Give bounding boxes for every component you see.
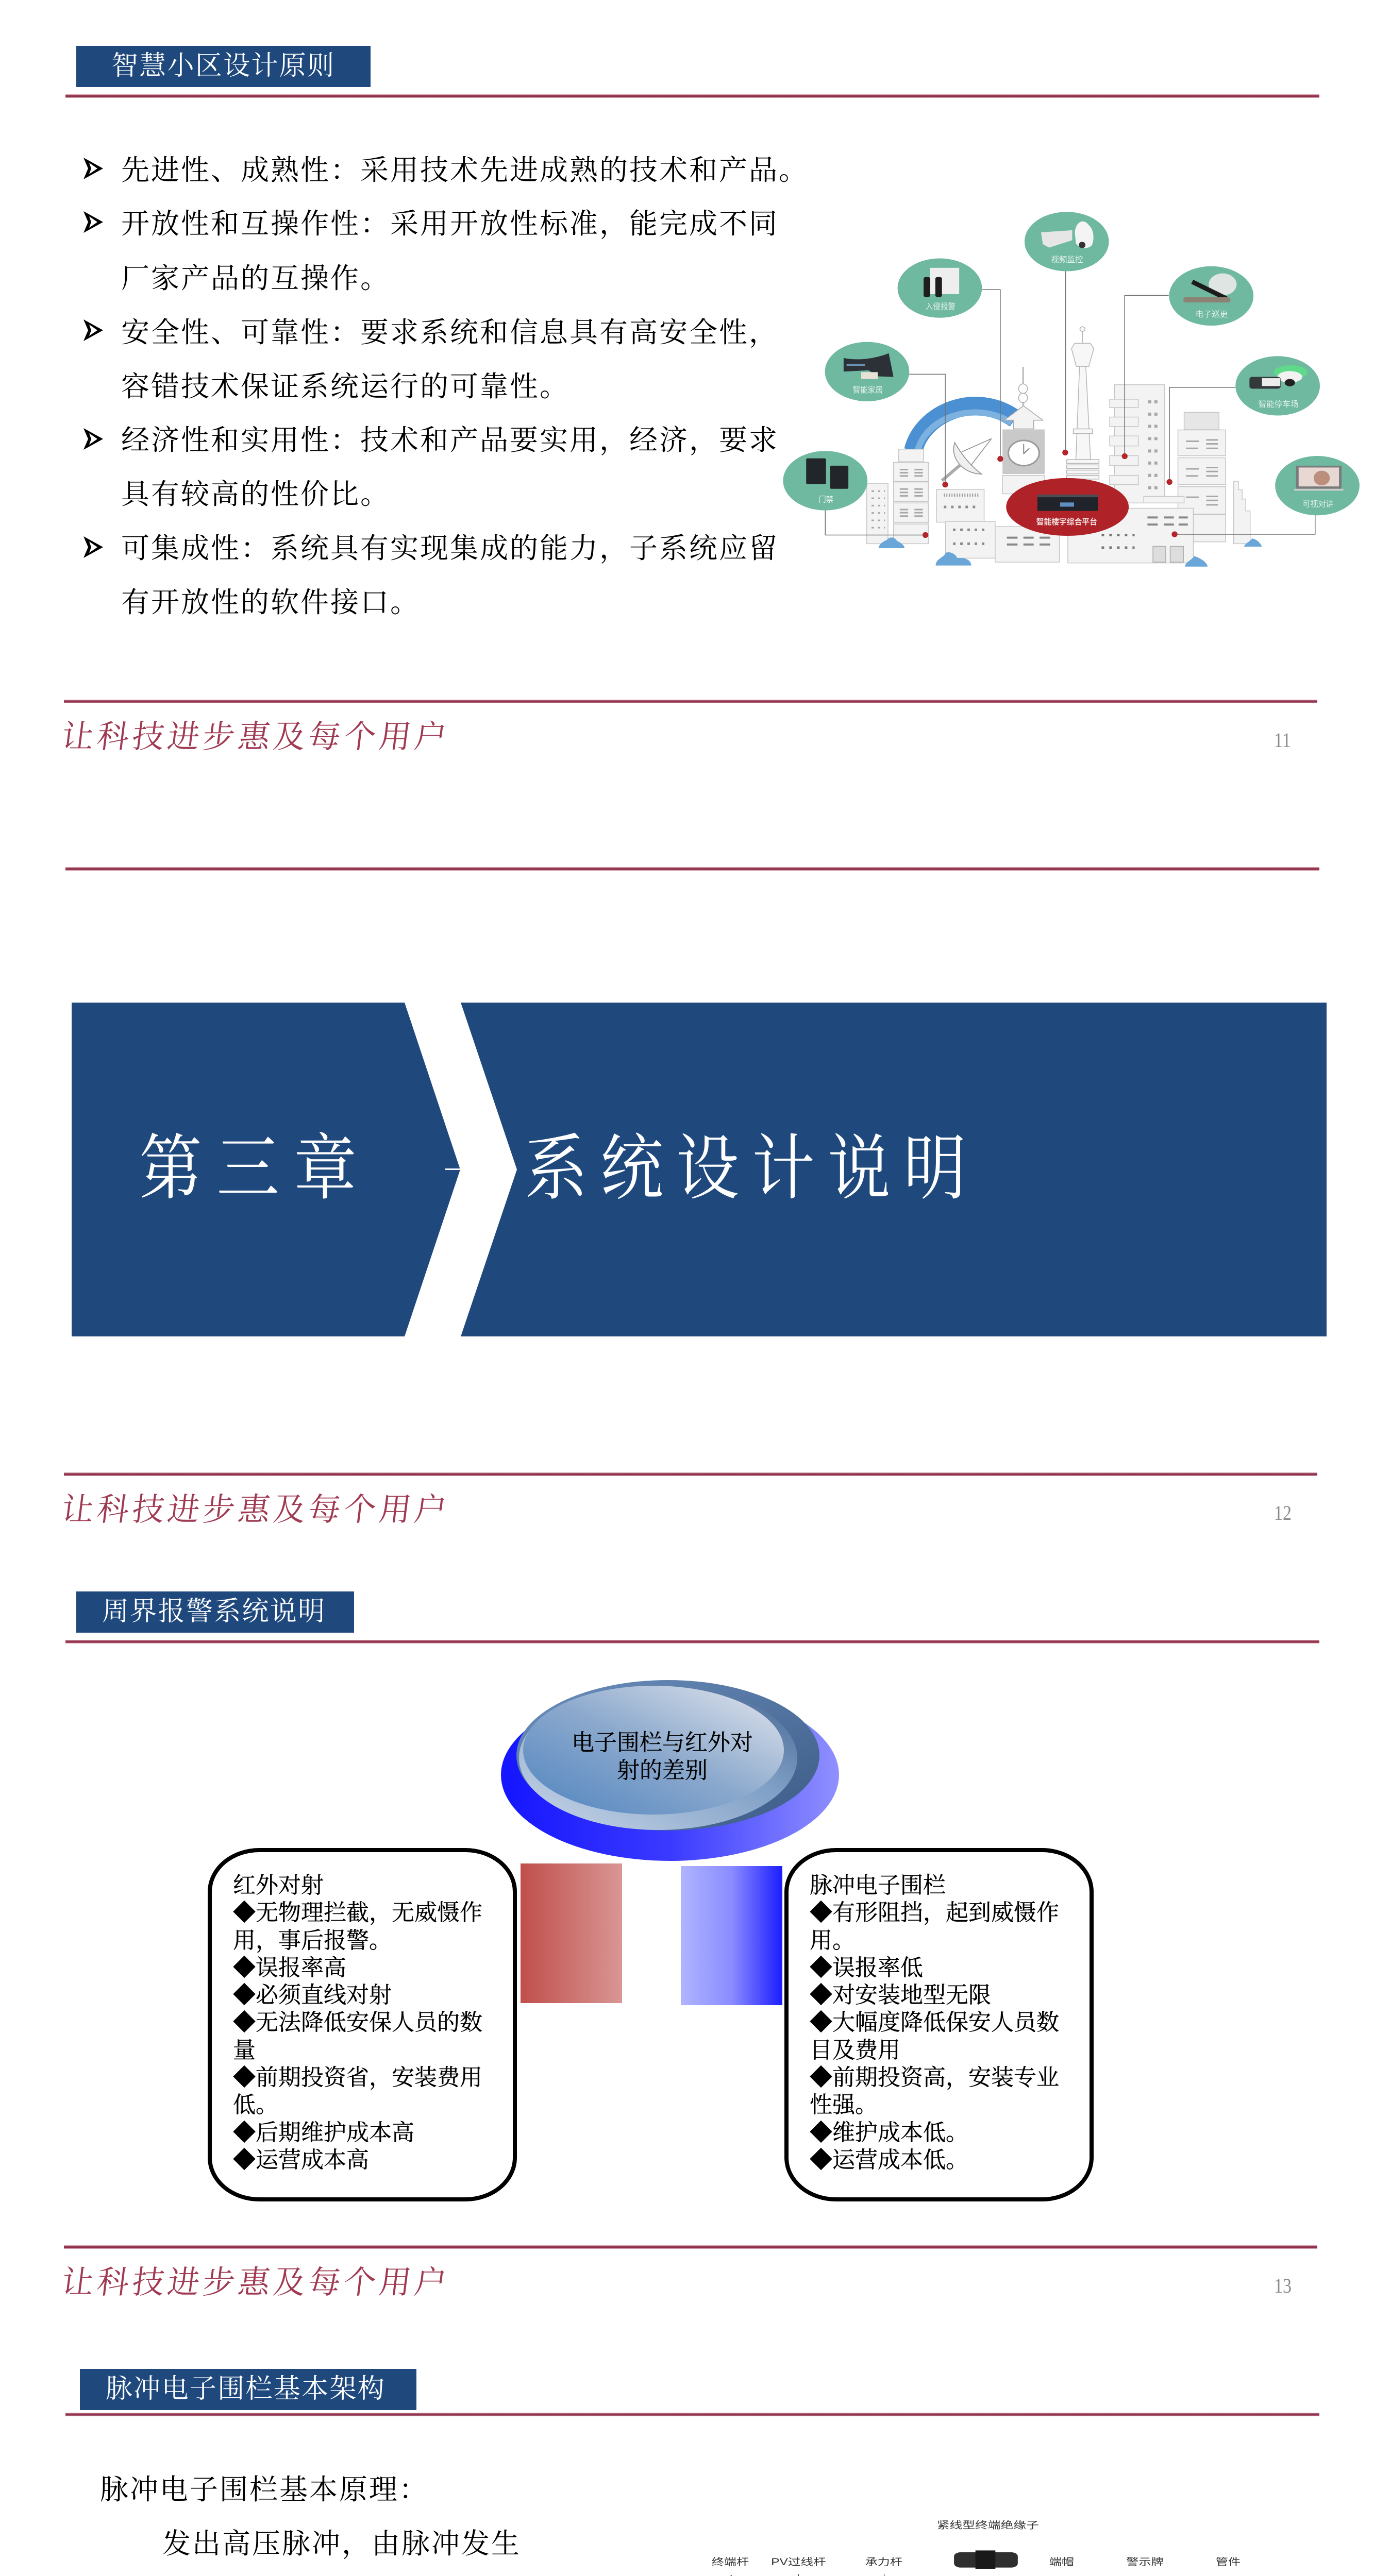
card text: pulse electronic fence: ◆对安装地型无限: [810, 1982, 991, 2008]
text: line 4: 安全性、可靠性：要求系统和信息具有高安全性，: [121, 317, 779, 348]
heading: fence architecture: [80, 2369, 416, 2410]
panel: slide 13 perimeter alarm comparison: [60, 1591, 1319, 2300]
fence labels: 端帽: [1049, 2556, 1074, 2567]
fence labels: 终端杆: [712, 2556, 749, 2567]
fence labels: [593, 2519, 1315, 2576]
central disc button: [501, 1680, 839, 1861]
footer: 13: [1274, 2274, 1292, 2297]
card text: pulse electronic fence: ◆前期投资高，安装专业: [810, 2065, 1059, 2090]
node: video surveillance: 视频监控: [1051, 255, 1083, 264]
footer: [60, 700, 1317, 755]
text: line 9: 有开放性的软件接口。: [121, 587, 420, 618]
fence labels: 紧线型终端绝缘子: [937, 2519, 1039, 2531]
footer: 12: [1274, 1501, 1292, 1524]
card text: infrared beam: ◆必须直线对射: [233, 1982, 392, 2008]
panel: slide 14 pulse fence architecture: [65, 2369, 1319, 2576]
card text: infrared beam: 红外对射: [233, 1873, 324, 1898]
card text: pulse electronic fence: 性强。: [810, 2092, 878, 2117]
node: smart parking: 智能停车场: [1258, 400, 1299, 409]
card text: infrared beam: ◆无物理拦截，无威慑作: [233, 1900, 482, 1925]
card text: infrared beam: ◆误报率高: [233, 1955, 346, 1980]
blue gradient bar: [681, 1866, 782, 2005]
clock tower: [1002, 367, 1045, 474]
text: line 5: 容错技术保证系统运行的可靠性。: [121, 371, 569, 402]
text: line 3: 厂家产品的互操作。: [121, 263, 390, 294]
component icons: [610, 2550, 1309, 2576]
connector lines: [825, 271, 1315, 535]
footer: [60, 1472, 1317, 1528]
card: infrared beam: [208, 1848, 517, 2201]
node: video surveillance: [1025, 212, 1109, 271]
node: video intercom: [1275, 456, 1360, 515]
card text: infrared beam: ◆前期投资省，安装费用: [233, 2065, 482, 2090]
rainbow arc: [913, 406, 1015, 450]
red gradient bar: [521, 1863, 622, 2003]
card text: pulse electronic fence: 脉冲电子围栏: [810, 1873, 946, 1898]
text block: fence principle: [100, 2474, 521, 2560]
heading: fence architecture: 脉冲电子围栏基本架构: [106, 2375, 386, 2404]
leader lines: [608, 2574, 1300, 2576]
icon: bullet arrow 5: [83, 536, 103, 558]
text block: fence principle: 发出高压脉冲，由脉冲发生: [162, 2528, 521, 2560]
illustration: smart city platform diagram: [783, 212, 1360, 567]
fence labels: PV过线杆: [771, 2556, 826, 2567]
footer: 11: [1274, 728, 1291, 752]
heading: design principles: [76, 46, 371, 87]
text: line 6: 经济性和实用性：技术和产品要实用，经济，要求: [121, 425, 779, 456]
connector dots: [923, 450, 1178, 538]
clouds: [879, 537, 1262, 567]
card text: infrared beam: 低。: [233, 2092, 278, 2117]
heading: perimeter alarm: 周界报警系统说明: [102, 1597, 326, 1626]
card text: infrared beam: 量: [233, 2038, 256, 2063]
disc label: [572, 1730, 753, 1783]
card text: pulse electronic fence: [810, 1873, 1059, 2173]
node: access control: 门禁: [818, 495, 833, 504]
text: line 2: 开放性和互操作性：采用开放性标准，能完成不同: [121, 208, 779, 240]
bullet list: principles: [83, 155, 809, 618]
card text: pulse electronic fence: ◆大幅度降低保安人员数: [810, 2010, 1059, 2035]
footer: 让科技进步惠及每个用户: [60, 2265, 452, 2300]
disc label: 射的差别: [617, 1758, 708, 1783]
node: intrusion alarm: 入侵报警: [926, 302, 956, 311]
node: central platform: [1006, 478, 1129, 536]
node: video intercom: 可视对讲: [1302, 499, 1334, 509]
panel: slide 12 chapter divider: [60, 867, 1327, 1528]
node: electronic patrol: 电子巡更: [1196, 310, 1228, 319]
card text: pulse electronic fence: 目及费用: [810, 2038, 900, 2063]
card text: pulse electronic fence: 用。: [810, 1928, 855, 1953]
text: line 7: 具有较高的性价比。: [121, 479, 390, 510]
card text: pulse electronic fence: ◆维护成本低。: [810, 2120, 968, 2145]
disc label: 电子围栏与红外对: [572, 1730, 753, 1755]
icon: bullet arrow 1: [83, 158, 103, 179]
card: pulse electronic fence: [784, 1848, 1094, 2201]
fence labels: 承力杆: [865, 2556, 902, 2567]
icon: bullet arrow 3: [83, 319, 103, 341]
card text: infrared beam: ◆后期维护成本高: [233, 2120, 414, 2145]
text: line 1: 先进性、成熟性：采用技术先进成熟的技术和产品。: [121, 155, 809, 186]
card text: pulse electronic fence: ◆有形阻挡，起到威慑作: [810, 1900, 1059, 1925]
node: electronic patrol: [1169, 266, 1253, 326]
footer: 让科技进步惠及每个用户: [60, 720, 452, 755]
text: line 8: 可集成性：系统具有实现集成的能力，子系统应留: [121, 533, 779, 564]
node: access control: [783, 451, 867, 511]
card text: infrared beam: ◆运营成本高: [233, 2147, 369, 2173]
fence labels: 警示牌: [1126, 2556, 1164, 2567]
satellite dish: [942, 438, 992, 481]
icon: bullet arrow 4: [83, 428, 103, 450]
node: smart home: 智能家居: [853, 385, 883, 394]
node: intrusion alarm: [898, 258, 982, 318]
card text: pulse electronic fence: ◆误报率低: [810, 1955, 923, 1980]
chapter banner chevrons: [72, 1003, 1327, 1336]
card text: infrared beam: 用，事后报警。: [233, 1928, 392, 1953]
text block: fence principle: 脉冲电子围栏基本原理：: [100, 2474, 429, 2505]
node: central platform: 智能楼宇综合平台: [1036, 517, 1097, 526]
node: smart parking: [1235, 356, 1320, 415]
card text: infrared beam: ◆无法降低安保人员的数: [233, 2010, 482, 2035]
card text: infrared beam: [233, 1873, 482, 2173]
icon: bullet arrow 2: [83, 211, 103, 233]
heading: chapter three: 第三章: [139, 1129, 371, 1209]
tv tower: [1067, 327, 1099, 479]
heading: design principles: 智慧小区设计原则: [111, 52, 335, 81]
node: smart home: [825, 342, 909, 401]
diagram: pulse electronic fence: [593, 2519, 1317, 2576]
footer: [60, 2245, 1317, 2300]
fence labels: 管件: [1216, 2556, 1241, 2567]
windows: [872, 402, 1218, 562]
buildings: [867, 385, 1250, 563]
heading: system design description: 系统设计说明: [525, 1129, 979, 1209]
card text: pulse electronic fence: ◆运营成本低。: [810, 2147, 968, 2173]
panel: slide 11 smart community design principles: [60, 46, 1360, 755]
heading: perimeter alarm: [76, 1591, 354, 1633]
footer: 让科技进步惠及每个用户: [60, 1493, 452, 1528]
